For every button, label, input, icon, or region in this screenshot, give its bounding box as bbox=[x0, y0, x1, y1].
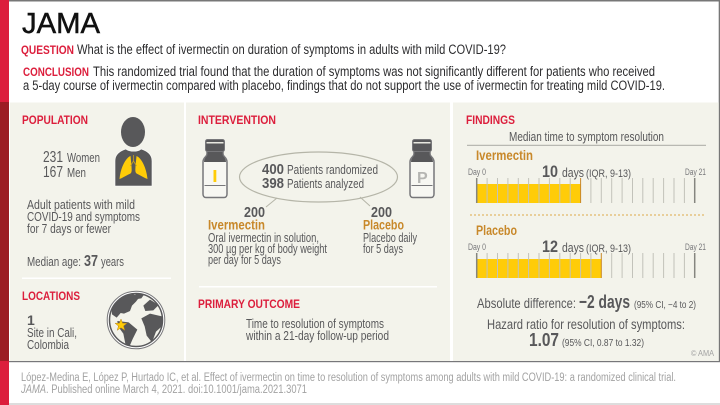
median age bbox=[27, 253, 124, 270]
panel: population and locations bbox=[10, 102, 184, 361]
population description bbox=[27, 198, 140, 236]
chart: placebo timeline bbox=[468, 223, 706, 278]
conclusion: CONCLUSION bbox=[23, 67, 89, 79]
population description: Adult patients with mild bbox=[27, 198, 135, 212]
women and men counts: Women bbox=[67, 151, 100, 165]
absolute difference: Absolute difference: bbox=[477, 296, 576, 311]
absolute difference bbox=[477, 291, 696, 312]
location text bbox=[27, 312, 77, 352]
chart: ivermectin timeline: 10 bbox=[542, 163, 558, 181]
placebo group: for 5 days bbox=[363, 242, 403, 256]
location text: Colombia bbox=[27, 338, 69, 352]
ivermectin group: Ivermectin bbox=[208, 218, 265, 232]
side strip bbox=[0, 0, 9, 405]
ivermectin group: per day for 5 days bbox=[208, 253, 281, 267]
primary outcome text: Time to resolution of symptoms bbox=[246, 317, 384, 331]
absolute difference: (95% CI, −4 to 2) bbox=[634, 300, 696, 311]
randomization ellipse: Patients randomized bbox=[287, 163, 378, 177]
median age: 37 bbox=[84, 253, 98, 270]
question: QUESTION bbox=[21, 45, 74, 57]
women and men counts: 167 bbox=[43, 164, 63, 181]
women and men counts bbox=[43, 149, 100, 181]
citation bbox=[20, 372, 676, 396]
women and men counts: Men bbox=[67, 166, 86, 180]
population description: COVID-19 and symptoms bbox=[27, 210, 140, 224]
hazard ratio: Hazard ratio for resolution of symptoms: bbox=[487, 317, 685, 332]
chart: placebo timeline: Day 0 bbox=[468, 242, 486, 252]
ivermectin group: 300 µg per kg of body weight bbox=[208, 242, 327, 256]
chart: placebo timeline: 12 bbox=[542, 238, 558, 256]
chart: ivermectin timeline bbox=[468, 148, 706, 203]
placebo group: 200 bbox=[371, 205, 392, 221]
primary outcome text: within a 21-day follow-up period bbox=[245, 329, 389, 343]
primary outcome text bbox=[245, 317, 389, 343]
intervention heading: INTERVENTION bbox=[198, 115, 276, 127]
women and men counts: 231 bbox=[43, 149, 63, 166]
randomization ellipse: Patients analyzed bbox=[287, 177, 364, 191]
placebo group bbox=[363, 205, 418, 256]
ivermectin group bbox=[208, 205, 327, 267]
icon: ivermectin vial bbox=[203, 140, 227, 198]
copyright: © AMA bbox=[691, 349, 715, 358]
chart: ivermectin timeline: Ivermectin bbox=[476, 148, 533, 163]
icon: placebo vial bbox=[410, 140, 434, 198]
chart: ivermectin timeline: Day 21 bbox=[685, 167, 706, 177]
population heading: POPULATION bbox=[22, 115, 88, 127]
randomization ellipse: 398 bbox=[262, 175, 284, 192]
icon: placebo vial: P bbox=[417, 170, 428, 187]
primary outcome heading: PRIMARY OUTCOME bbox=[198, 299, 300, 311]
locations heading: LOCATIONS bbox=[22, 291, 80, 303]
chart: placebo timeline: Placebo bbox=[476, 223, 517, 238]
chart: ivermectin timeline: Day 0 bbox=[468, 167, 486, 177]
ivermectin group: 200 bbox=[244, 205, 265, 221]
population description: for 7 days or fewer bbox=[27, 222, 111, 236]
hazard ratio: (95% CI, 0.87 to 1.32) bbox=[562, 338, 644, 349]
chart subtitle: Median time to symptom resolution bbox=[509, 130, 664, 144]
hazard ratio bbox=[487, 317, 685, 350]
placebo group: Placebo daily bbox=[363, 231, 418, 245]
placebo group: Placebo bbox=[363, 218, 404, 232]
chart: ivermectin timeline: (IQR, 9-13) bbox=[586, 168, 631, 180]
JAMA logo: JAMA bbox=[22, 8, 101, 40]
chart: placebo timeline: (IQR, 9-13) bbox=[586, 243, 631, 255]
chart: placebo timeline: days bbox=[562, 241, 584, 255]
randomization ellipse bbox=[240, 152, 398, 202]
citation: JAMA. Published online March 4, 2021. doi:10.1001/jama.2021.3071 bbox=[20, 384, 307, 396]
question: What is the effect of ivermectin on duration of symptoms in adults with mild COVID-19? bbox=[77, 42, 506, 57]
absolute difference: −2 days bbox=[579, 291, 630, 312]
location text: Site in Cali, bbox=[27, 326, 77, 340]
hazard ratio: 1.07 bbox=[529, 330, 559, 350]
ivermectin group: Oral ivermectin in solution, bbox=[208, 231, 319, 245]
randomization ellipse: 400 bbox=[262, 161, 284, 178]
chart: ivermectin timeline: days bbox=[562, 166, 584, 180]
median age: years bbox=[101, 255, 124, 269]
icon: person with lungs bbox=[115, 117, 152, 186]
icon: globe with star bbox=[107, 291, 165, 349]
conclusion bbox=[23, 64, 665, 93]
panel: findings bbox=[453, 102, 719, 361]
location text: 1 bbox=[27, 312, 35, 328]
chart: placebo timeline: Day 21 bbox=[685, 242, 706, 252]
median age: Median age: bbox=[27, 255, 81, 269]
panel: intervention and primary outcome bbox=[186, 102, 450, 361]
findings heading: FINDINGS bbox=[466, 115, 515, 127]
